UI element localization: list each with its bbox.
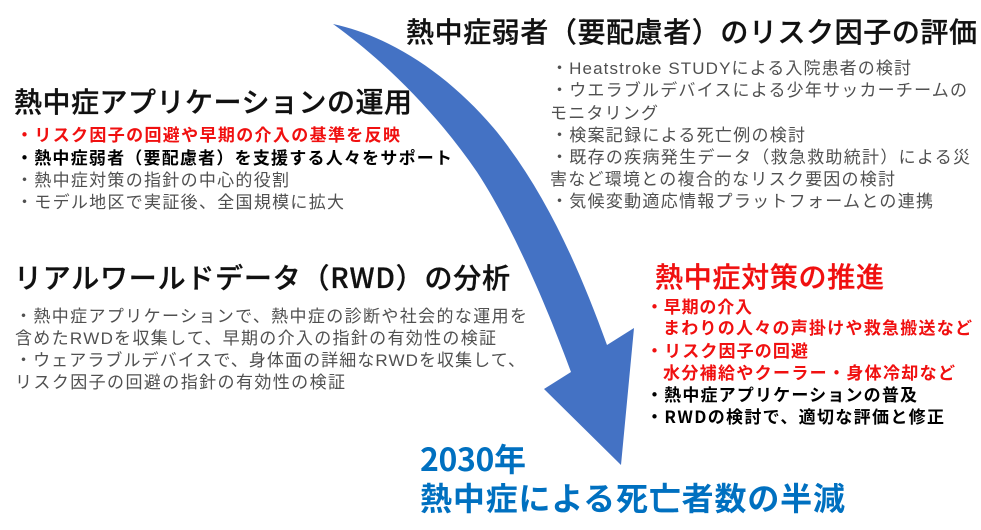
goal: 2030 heatstroke death reduction: 2030年: [420, 435, 526, 481]
text block: risk factor items: ・既存の疾病発生データ（救急救助統計）による災: [551, 147, 970, 167]
text block: risk factor items: ・検案記録による死亡例の検討: [551, 126, 805, 145]
text block: application items: ・熱中症対策の指針の中心的役割: [16, 171, 289, 190]
section: heat-vulnerable risk factor evaluation: [406, 11, 977, 211]
goal: 2030 heatstroke death reduction: [420, 435, 845, 520]
text block: risk factor items: [550, 59, 970, 211]
text block: risk factor items: ・ウエラブルデバイスによる少年サッカーチームの: [551, 80, 967, 100]
text block: promotion items: [646, 293, 972, 428]
text block: promotion items: まわりの人々の声掛けや救急搬送など: [663, 314, 972, 339]
text block: RWD items: 含めたRWDを収集して、早期の介入の指針の有効性の検証: [15, 329, 496, 348]
text block: application items: [16, 121, 452, 212]
heading: risk factor evaluation: 熱中症弱者（要配慮者）のリスク因子の評価: [406, 11, 977, 51]
text block: application items: ・リスク因子の回避や早期の介入の基準を反映: [16, 121, 400, 146]
text block: RWD items: ・ウェアラブルデバイスで、身体面の詳細なRWDを収集して、: [15, 350, 525, 370]
text block: risk factor items: 害など環境との複合的なリスク要因の検討: [550, 170, 895, 189]
heading: promotion of measures: 熱中症対策の推進: [655, 256, 884, 296]
text block: promotion items: ・RWDの検討で、適切な評価と修正: [646, 403, 944, 428]
heading: application operation: 熱中症アプリケーションの運用: [14, 81, 412, 121]
text block: RWD items: リスク因子の回避の指針の有効性の検証: [15, 373, 345, 392]
section: heatstroke application operation: [14, 81, 452, 212]
text block: risk factor items: ・気候変動適応情報プラットフォームとの連携: [551, 192, 933, 211]
text block: promotion items: ・熱中症アプリケーションの普及: [646, 381, 917, 406]
text block: application items: ・モデル地区で実証後、全国規模に拡大: [16, 192, 344, 212]
text block: promotion items: ・早期の介入: [646, 293, 752, 318]
goal: 2030 heatstroke death reduction: 熱中症による死亡者数の半減: [420, 474, 845, 520]
text block: promotion items: ・リスク因子の回避: [646, 337, 808, 362]
arrow: curved blue arrow: [333, 24, 634, 465]
section: promotion of heatstroke measures: [646, 256, 972, 428]
text block: risk factor items: ・Heatstroke STUDYによる入院患者の検討: [551, 59, 911, 78]
heading: RWD analysis: リアルワールドデータ（RWD）の分析: [14, 257, 510, 297]
text block: promotion items: 水分補給やクーラー・身体冷却など: [663, 359, 955, 384]
text block: RWD items: [15, 307, 527, 392]
text block: risk factor items: モニタリング: [550, 104, 658, 123]
text block: RWD items: ・熱中症アプリケーションで、熱中症の診断や社会的な運用を: [15, 307, 527, 326]
text block: application items: ・熱中症弱者（要配慮者）を支援する人々をサポート: [16, 144, 452, 169]
section: real world data analysis: [14, 257, 527, 392]
